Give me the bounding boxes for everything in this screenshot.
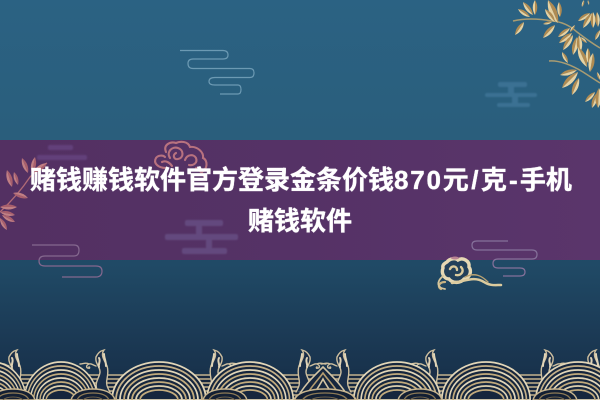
gold swirl cloud	[438, 256, 501, 289]
ghost cloud: top right	[485, 82, 537, 107]
line cloud: lower right	[472, 241, 537, 276]
peaked centre wave	[296, 367, 350, 400]
small dark arcs	[0, 389, 577, 400]
valley lines	[0, 375, 600, 395]
ghost cloud: band top left	[37, 145, 87, 160]
wave crests	[0, 350, 600, 392]
ghost cloud: band centre	[165, 220, 238, 254]
pink swirl cloud	[155, 142, 207, 178]
large concentric arcs	[0, 362, 600, 400]
title line 2: 赌钱软件	[248, 206, 352, 236]
line cloud: top	[180, 50, 254, 94]
gold bamboo	[513, 0, 600, 109]
line cloud: lower left	[32, 245, 102, 277]
title line 1: 赌钱赚钱软件官方登录金条价钱870元/克-手机	[30, 165, 572, 195]
dark base behind the waves	[0, 376, 600, 400]
pink bamboo	[0, 157, 48, 231]
purple band	[0, 140, 600, 260]
title	[30, 165, 572, 236]
wave border	[0, 350, 600, 400]
